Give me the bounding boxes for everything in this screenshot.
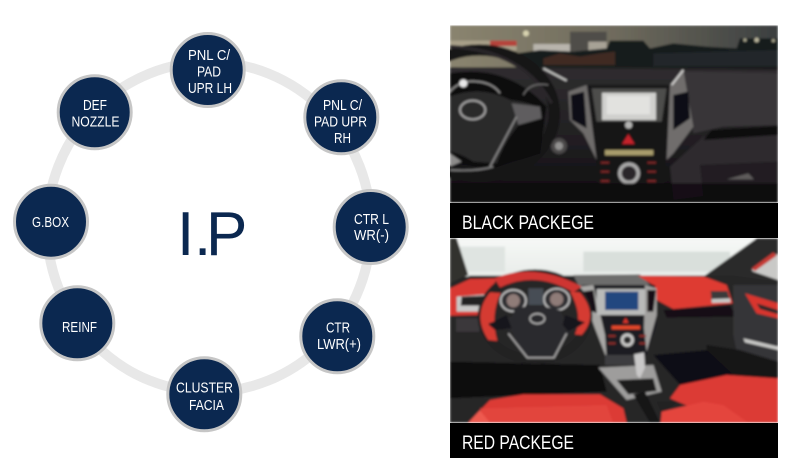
shifter tunnel xyxy=(598,365,662,400)
panel: red package caption strip: RED PACKEGE xyxy=(462,433,574,454)
panel: black package photo xyxy=(450,25,778,203)
red dash right xyxy=(638,276,733,309)
node: PNL C/ PAD UPR RH: RH xyxy=(334,130,351,147)
node: CTR LWR(+): LWR(+) xyxy=(317,336,361,353)
panel: black package caption strip xyxy=(450,203,778,238)
node: G.BOX: G.BOX xyxy=(32,214,69,231)
node: CTR L WR(-): WR(-) xyxy=(354,227,389,244)
dashboard body xyxy=(450,276,778,423)
panel: black package caption strip: BLACK PACKEGE xyxy=(462,213,594,234)
node: CLUSTER FACIA: CLUSTER xyxy=(176,380,233,397)
steering wheel xyxy=(482,274,588,359)
node: DEF NOZZLE: NOZZLE xyxy=(72,114,120,131)
A-pillars xyxy=(450,238,468,283)
node: CLUSTER FACIA xyxy=(168,358,241,431)
background ring xyxy=(47,62,371,392)
node: CLUSTER FACIA: FACIA xyxy=(189,397,224,414)
panel: red package photo xyxy=(450,238,778,423)
node: PNL C/ PAD UPR RH: PAD UPR xyxy=(314,114,367,131)
node: PNL C/ PAD UPR LH: PNL C/ xyxy=(188,47,231,64)
node: PNL C/ PAD UPR LH: UPR LH xyxy=(188,80,232,97)
steering wheel xyxy=(450,43,560,182)
node: REINF xyxy=(41,287,114,360)
door xyxy=(733,285,778,368)
node: CTR L WR(-) xyxy=(334,190,407,264)
crowd xyxy=(517,38,778,67)
node: G.BOX xyxy=(14,185,88,258)
floor xyxy=(450,362,607,398)
center console xyxy=(582,285,657,357)
node: PNL C/ PAD UPR LH xyxy=(171,34,244,106)
node: CTR L WR(-): CTR L xyxy=(354,211,389,228)
node: DEF NOZZLE: DEF xyxy=(83,97,107,114)
node: PNL C/ PAD UPR RH: PNL C/ xyxy=(323,97,363,114)
center console xyxy=(588,86,669,185)
center title: I.P: I.P xyxy=(177,200,247,269)
seats xyxy=(468,394,627,423)
node: PNL C/ PAD UPR RH xyxy=(305,81,378,154)
node: CTR LWR(+) xyxy=(301,300,374,373)
node: PNL C/ PAD UPR LH: PAD xyxy=(197,64,221,81)
node: DEF NOZZLE xyxy=(58,76,131,149)
dashboard xyxy=(450,67,778,203)
panel: red package caption strip xyxy=(450,423,778,458)
node: REINF: REINF xyxy=(62,319,97,336)
red dash left xyxy=(450,278,497,316)
node: CTR LWR(+): CTR xyxy=(326,320,350,337)
